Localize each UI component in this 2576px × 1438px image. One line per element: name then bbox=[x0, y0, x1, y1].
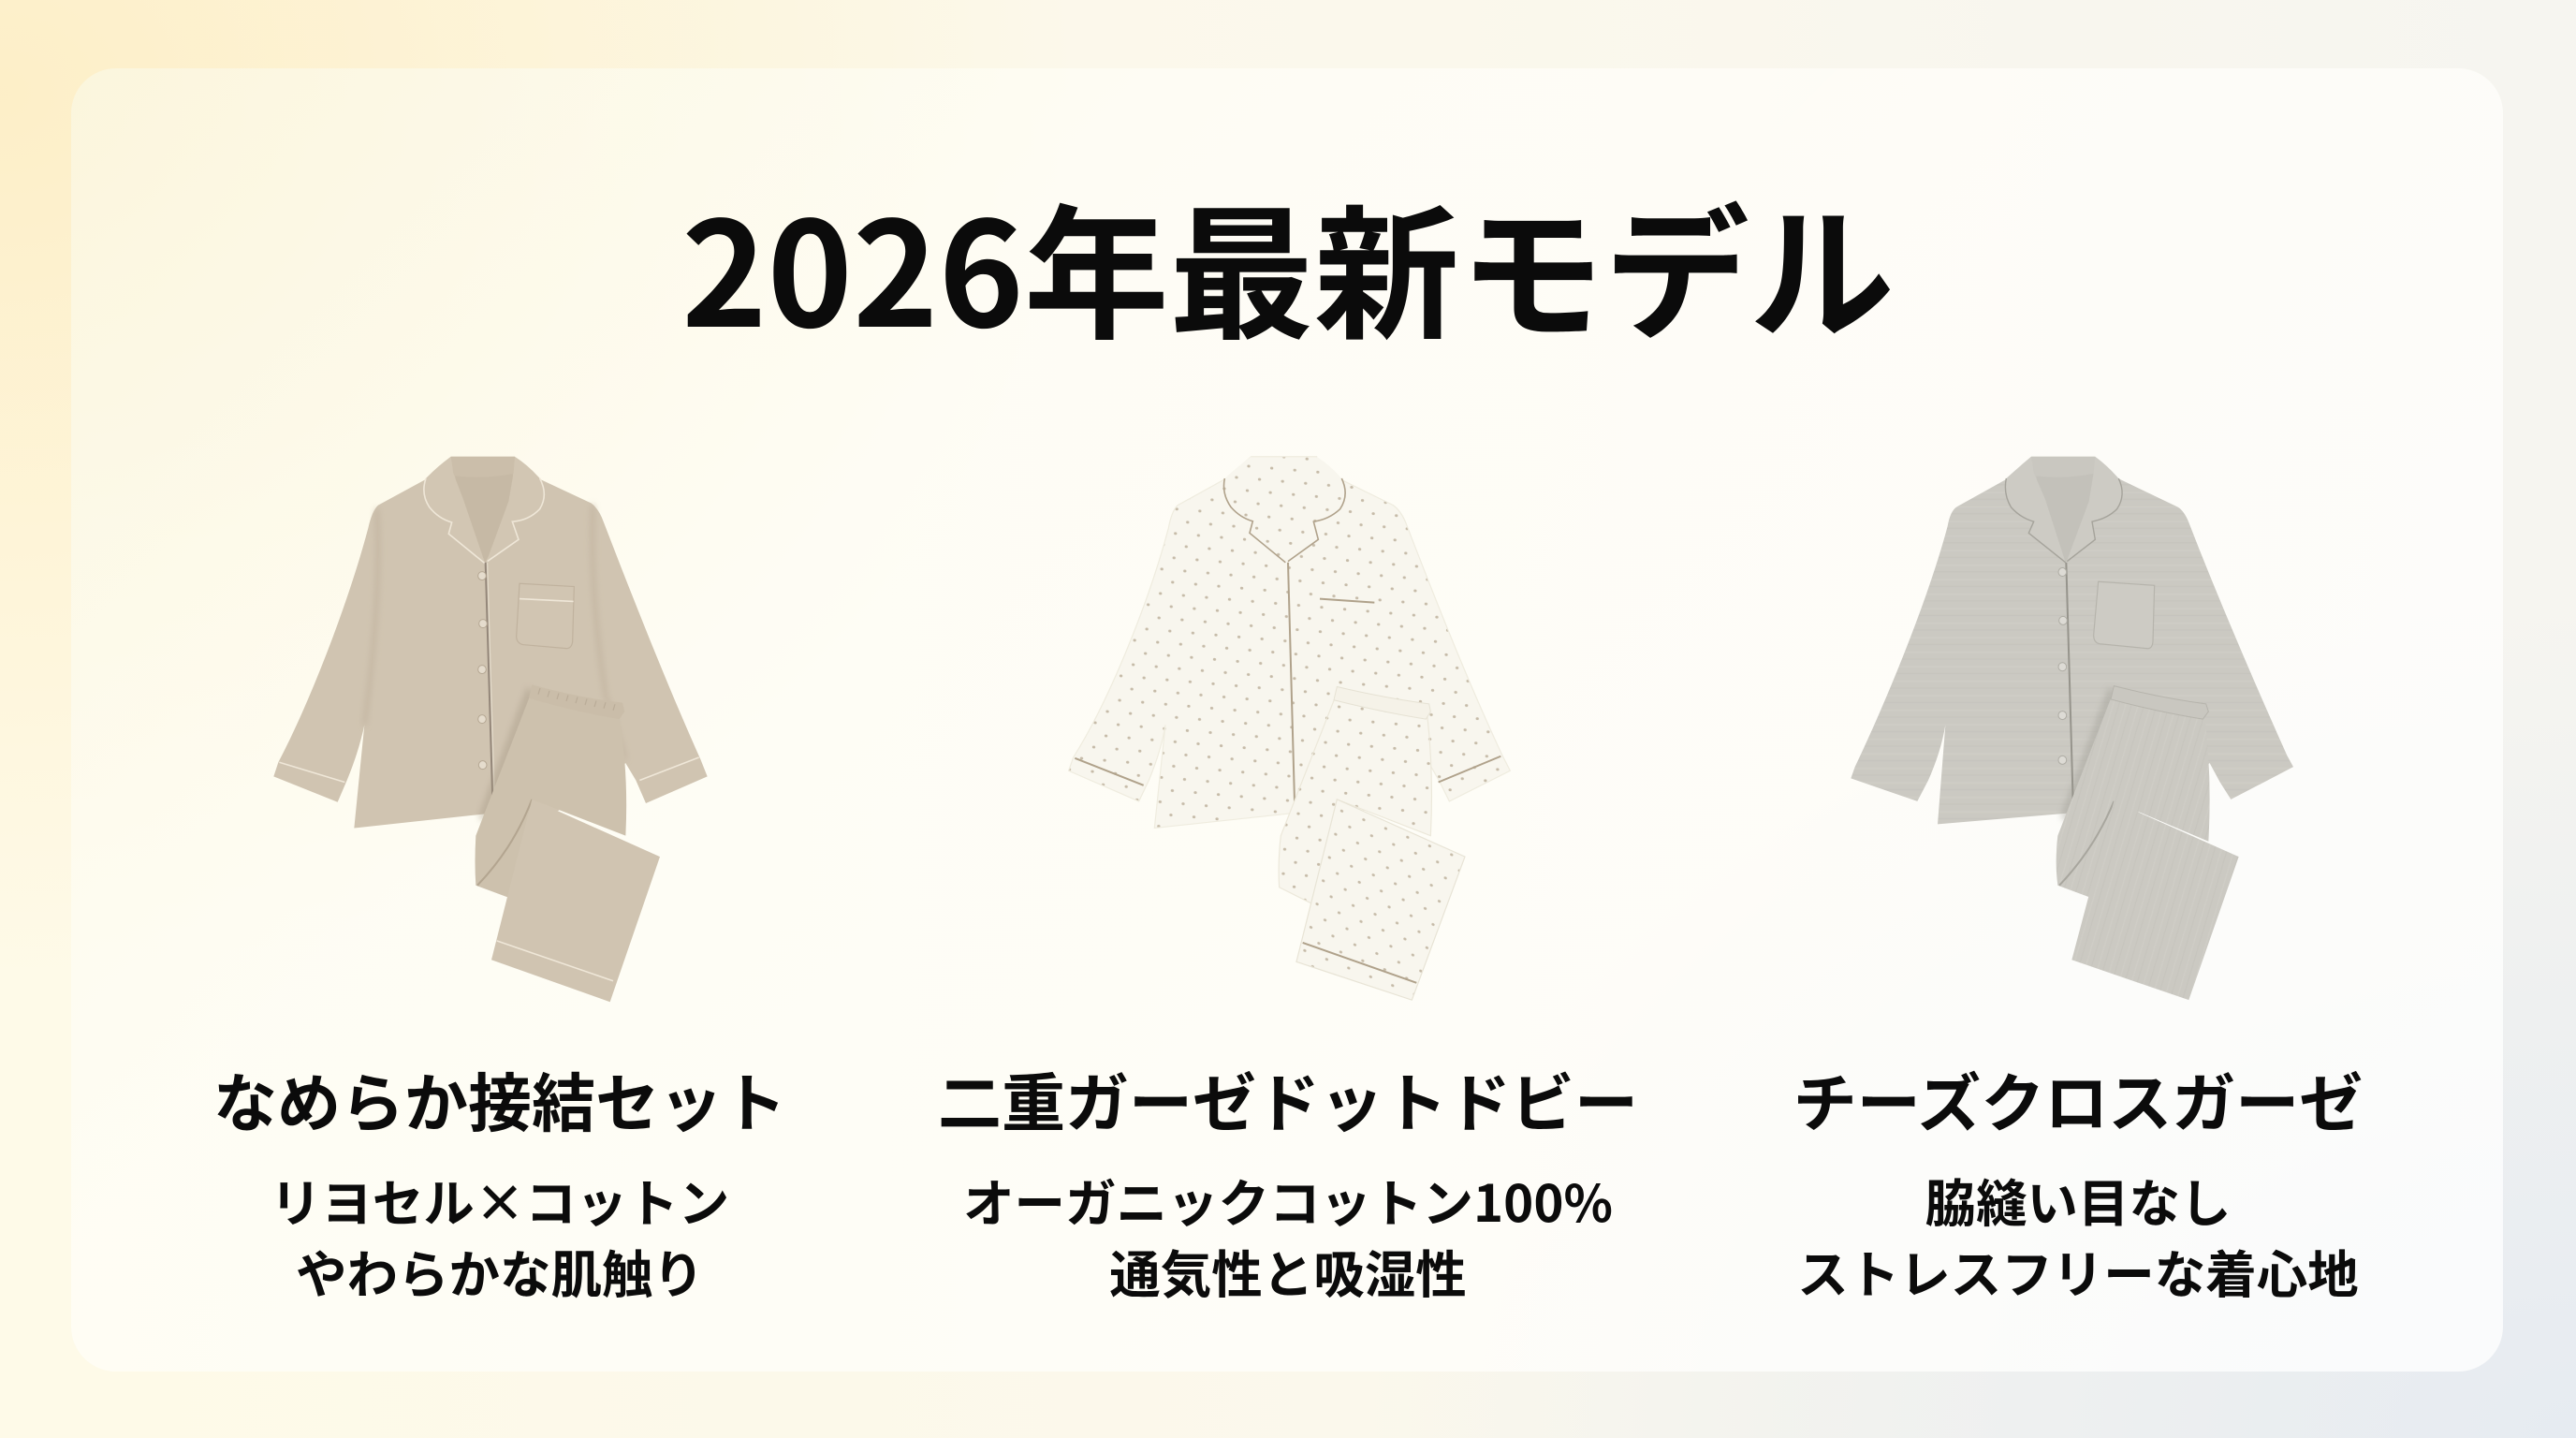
cuff piping bbox=[279, 757, 699, 783]
collar back bbox=[451, 457, 515, 477]
inner neck bbox=[453, 465, 515, 563]
collar piping bbox=[1224, 478, 1345, 563]
product description: 通気性と吸湿性 bbox=[1109, 1234, 1467, 1308]
product name: なめらか接結セット bbox=[213, 1052, 786, 1145]
inner neck bbox=[2034, 465, 2095, 563]
product description: オーガニックコットン100% bbox=[963, 1163, 1613, 1237]
pocket bbox=[2094, 581, 2155, 649]
pants shadow bbox=[2066, 691, 2114, 820]
collar piping bbox=[2005, 478, 2122, 563]
collar and lapels bbox=[424, 457, 544, 564]
product description bbox=[271, 1163, 729, 1308]
panel: product 1 bbox=[213, 457, 786, 1308]
sleeve seams bbox=[364, 506, 625, 759]
shirt body bbox=[273, 457, 708, 828]
pocket piping bbox=[1320, 599, 1374, 603]
fold hem piping bbox=[497, 941, 613, 981]
title: 2026年最新モデル bbox=[681, 158, 1895, 369]
product description: ストレスフリーな着心地 bbox=[1797, 1234, 2359, 1308]
waistband bbox=[529, 684, 624, 719]
leg crease bbox=[2059, 801, 2114, 886]
pocket bbox=[517, 583, 574, 649]
pants fold bbox=[491, 800, 660, 1002]
product description: リヨセル×コットン bbox=[271, 1163, 729, 1237]
shirt body bbox=[1851, 457, 2293, 824]
panel: product 3 bbox=[1793, 457, 2363, 1308]
pants back leg bbox=[2056, 697, 2210, 899]
product description: 脇縫い目なし bbox=[1925, 1163, 2232, 1237]
inner neck bbox=[1254, 465, 1317, 563]
pants back leg bbox=[1279, 698, 1431, 904]
product description: やわらかな肌触り bbox=[296, 1234, 704, 1308]
cuff piping bbox=[1075, 756, 1500, 785]
icon: beige pajama set bbox=[273, 457, 708, 1002]
pants fold bbox=[1296, 800, 1465, 1000]
leg crease bbox=[477, 800, 532, 886]
icon: white dotted pajama set bbox=[1068, 456, 1511, 1001]
waistband bbox=[2111, 686, 2208, 719]
buttons bbox=[2058, 568, 2067, 764]
waistband bbox=[1334, 686, 1430, 719]
product description bbox=[1797, 1163, 2359, 1308]
product name: 二重ガーゼドットドビー bbox=[938, 1052, 1638, 1145]
product name: チーズクロスガーゼ bbox=[1793, 1052, 2363, 1145]
buttons bbox=[478, 572, 487, 770]
placket bbox=[1288, 563, 1295, 813]
panel: product 2 bbox=[938, 456, 1638, 1308]
fold hem piping bbox=[1303, 943, 1416, 983]
collar and lapels bbox=[2005, 457, 2122, 563]
product description bbox=[963, 1163, 1613, 1308]
pants shadow bbox=[484, 691, 532, 820]
pocket piping bbox=[520, 599, 574, 601]
waistband gathers bbox=[538, 688, 615, 711]
placket bbox=[486, 563, 493, 813]
pants back leg bbox=[476, 697, 626, 899]
pants fold bbox=[2071, 801, 2239, 1000]
shirt body bbox=[1069, 457, 1510, 828]
collar and lapels bbox=[1224, 457, 1345, 563]
collar piping bbox=[424, 478, 544, 564]
placket bbox=[2066, 563, 2073, 813]
icon: grey gauze pajama set bbox=[1851, 457, 2293, 1000]
collar back bbox=[2031, 457, 2095, 477]
